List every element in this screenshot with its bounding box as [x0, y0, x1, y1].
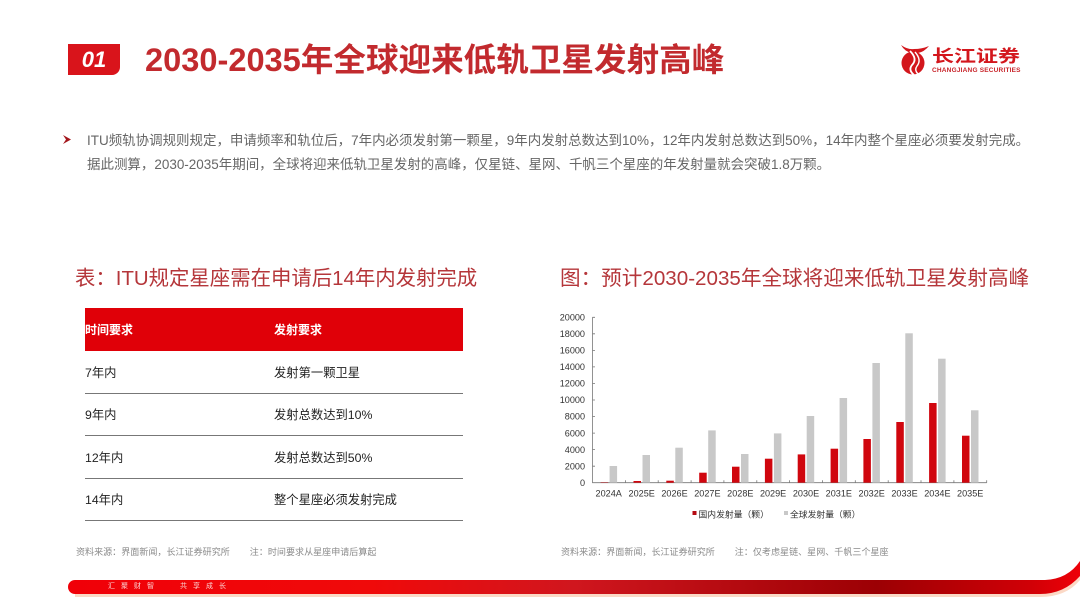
y axis labels: 20000: [560, 312, 585, 322]
table source note: 资料来源：界面新闻，长江证券研究所 注：时间要求从星座申请后算起: [76, 547, 376, 557]
logo: Changjiang Securities: [901, 45, 1021, 74]
table heading: 表：ITU规定星座需在申请后14年内发射完成: [75, 268, 477, 290]
y axis labels: 10000: [560, 395, 585, 405]
table row 4: 整个星座必须发射完成: [274, 493, 397, 507]
chart heading: 图：预计2030-2035年全球将迎来低轨卫星发射高峰: [560, 267, 1029, 290]
section number badge: [68, 44, 120, 75]
x axis labels: 2029E: [760, 488, 786, 498]
table: launch deadlines: [85, 308, 463, 521]
x axis labels: 2025E: [629, 488, 655, 498]
y axis labels: 4000: [565, 445, 585, 455]
logo English name: CHANGJIANG SECURITIES: [932, 67, 1021, 74]
table header: 发射要求: [274, 323, 322, 337]
gray bars: global launches: [610, 333, 978, 483]
red bars: domestic launches: [601, 403, 970, 483]
logo Chinese name: 长江证券: [932, 46, 1020, 66]
table row 3: [85, 436, 463, 478]
x axis labels: 2026E: [661, 488, 688, 498]
x axis labels: 2033E: [891, 488, 918, 498]
table row 3: 发射总数达到50%: [274, 450, 372, 464]
table row 1: 7年内: [85, 366, 116, 380]
intro line 1: ITU频轨协调规则规定，申请频率和轨位后，7年内必须发射第一颗星，9年内发射总数达到10%，12年内发射总数达到50%，14年内整个星座必须要发射完成。: [87, 133, 1029, 148]
y axis labels: 12000: [560, 379, 585, 389]
x axis labels: 2032E: [859, 488, 885, 498]
y axis labels: 8000: [565, 412, 585, 422]
y axis labels: 0: [580, 478, 585, 488]
table row 1: 发射第一颗卫星: [274, 366, 360, 380]
bar chart: launches per year: [560, 312, 988, 520]
footer slogan: 汇聚财智 共享成长: [108, 583, 232, 590]
table row 4: 14年内: [85, 493, 123, 507]
x axis labels: 2027E: [694, 488, 721, 498]
logo icon: [901, 45, 929, 74]
table row 2: 9年内: [85, 408, 116, 422]
table row 2: [85, 393, 463, 436]
section number badge: 01: [82, 47, 106, 72]
legend: 国内发射量（颗）: [698, 508, 769, 520]
x axis labels: 2034E: [924, 488, 951, 498]
x axis labels: 2030E: [793, 488, 819, 498]
x axis labels: [596, 488, 983, 498]
table row 1: [85, 351, 463, 394]
y axis labels: 6000: [565, 428, 585, 438]
table row 2: 发射总数达到10%: [274, 408, 372, 422]
legend: [692, 508, 860, 520]
footer ribbon: [68, 561, 1080, 597]
intro text block: [63, 133, 1029, 172]
y axis labels: 2000: [565, 461, 585, 471]
x axis labels: 2024A: [596, 488, 623, 498]
chart source note: 资料来源：界面新闻，长江证券研究所 注：仅考虑星链、星网、千帆三个星座: [561, 547, 889, 557]
table row 4: [85, 478, 463, 521]
y axis labels: 14000: [560, 362, 585, 372]
y axis labels: 16000: [560, 346, 585, 356]
y axis labels: 18000: [560, 329, 585, 339]
axes: [592, 317, 987, 483]
table header: [85, 308, 463, 351]
legend: 全球发射量（颗）: [790, 508, 860, 520]
table header: 时间要求: [85, 323, 133, 337]
bullet arrow: [63, 135, 71, 144]
x axis labels: 2035E: [957, 488, 983, 498]
x axis labels: 2028E: [727, 488, 753, 498]
title: 2030-2035年全球迎来低轨卫星发射高峰: [145, 41, 724, 78]
intro line 2: 据此测算，2030-2035年期间，全球将迎来低轨卫星发射的高峰，仅星链、星网、千帆三个星座的年发射量就会突破1.8万颗。: [87, 157, 830, 172]
table row 3: 12年内: [85, 450, 123, 464]
x axis labels: 2031E: [826, 488, 852, 498]
y axis labels: [560, 312, 585, 488]
